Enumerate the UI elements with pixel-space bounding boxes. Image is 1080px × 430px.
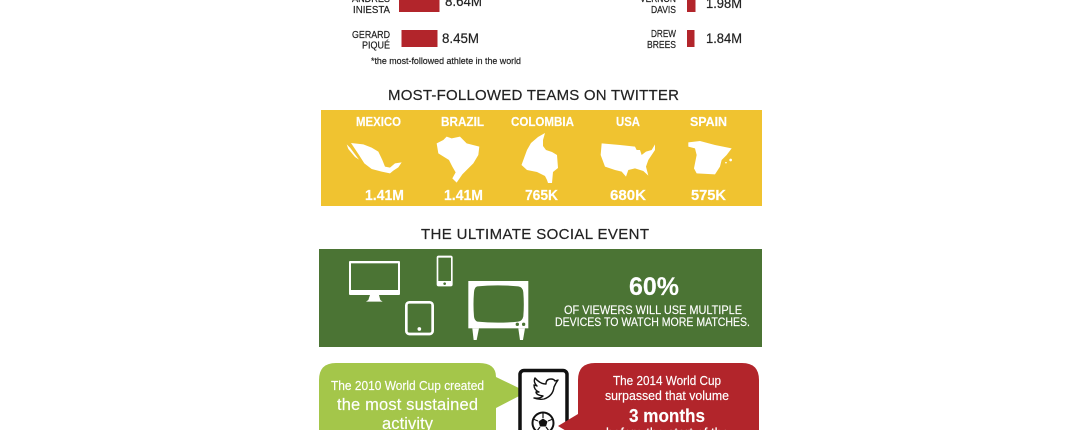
map: Brazil [437, 137, 479, 183]
team values: 765K [525, 188, 558, 204]
team values: 575K [691, 188, 727, 204]
athlete label: Gerard Pique: GERARD [352, 30, 390, 41]
icon: desktop monitor [349, 261, 400, 302]
value: Pique: 8.45M [442, 30, 479, 46]
map: Mexico [347, 143, 402, 173]
athlete label: Gerard Pique [352, 30, 390, 52]
team labels: MEXICO [356, 115, 401, 129]
panel: social event [319, 249, 762, 347]
athlete label: Drew Brees [647, 29, 676, 51]
callout: 2014 World Cup: The 2014 World Cup [613, 374, 721, 388]
team values: 1.41M [365, 188, 404, 204]
stat description [555, 303, 750, 329]
stat description: DEVICES TO WATCH MORE MATCHES. [555, 315, 750, 329]
team values [365, 188, 727, 204]
callout: 2010 World Cup: the most sustained [337, 396, 478, 414]
callout: 2014 World Cup: 3 months [629, 406, 705, 426]
callout: 2014 World Cup: surpassed that volume [605, 389, 729, 403]
stat: 60 percent: 60% [629, 273, 679, 301]
athlete label: Vernon Davis: DAVIS [651, 5, 676, 16]
value: Brees: 1.84M [706, 30, 742, 46]
callout: 2014 World Cup [558, 363, 759, 430]
icon: football [532, 412, 554, 430]
bar: Iniesta [399, 0, 440, 12]
athlete label: Andres Iniesta: INIESTA [353, 5, 390, 16]
heading: ultimate social event: THE ULTIMATE SOCIAL EVENT [421, 226, 649, 243]
team labels: BRAZIL [441, 115, 484, 129]
bar: Pique [402, 30, 438, 47]
heading: most-followed teams: MOST-FOLLOWED TEAMS ON TWITTER [388, 87, 679, 104]
team labels: USA [616, 115, 640, 129]
panel: most-followed athletes left [352, 0, 521, 67]
map: USA [601, 143, 655, 177]
icon: television [468, 281, 528, 340]
bar: Davis [687, 0, 696, 12]
athlete label: Andres Iniesta [352, 0, 390, 16]
stat description: OF VIEWERS WILL USE MULTIPLE [564, 303, 742, 317]
team values: 1.41M [444, 188, 483, 204]
athlete label: Drew Brees: BREES [647, 40, 676, 51]
panel: most-followed athletes right [640, 0, 742, 51]
team labels: COLOMBIA [511, 115, 574, 129]
footnote: *the most-followed athlete in the world [371, 56, 521, 67]
team labels: SPAIN [690, 115, 727, 129]
athlete label: Vernon Davis [640, 0, 676, 16]
team values: 680K [610, 188, 647, 204]
icon: tablet [406, 302, 433, 334]
icon: smartphone [437, 256, 453, 286]
panel: teams on Twitter [321, 110, 762, 206]
map: Spain [688, 141, 732, 174]
callout: 2010 World Cup: The 2010 World Cup created [331, 379, 484, 393]
bar: Brees [687, 30, 694, 47]
icon: twitter bird [534, 378, 558, 399]
team labels [356, 115, 727, 129]
map: Colombia [522, 133, 558, 183]
athlete label: Drew Brees: DREW [651, 29, 676, 40]
icon: phone with twitter and football [520, 370, 567, 430]
athlete label: Gerard Pique: PIQUÉ [362, 38, 390, 52]
callout: 2010 World Cup [319, 363, 527, 430]
